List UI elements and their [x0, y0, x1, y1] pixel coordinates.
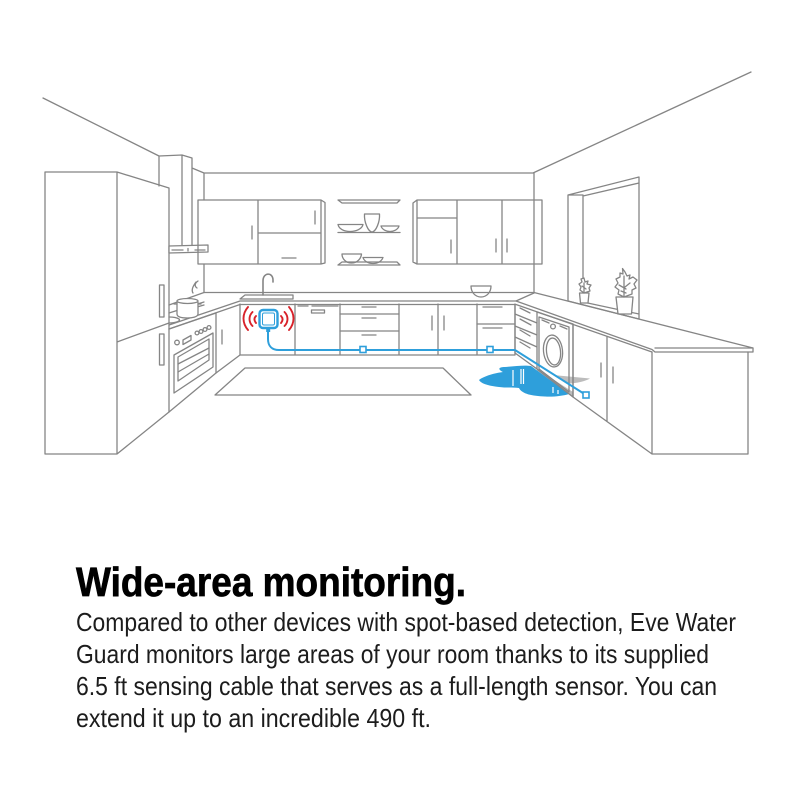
- body text: extend it up to an incredible 490 ft.: [76, 703, 431, 733]
- right base cabinets: [573, 324, 748, 454]
- potted plants: [579, 268, 637, 314]
- room walls and ceiling lines: [43, 72, 751, 293]
- sink and faucet: [240, 274, 293, 299]
- oven: [169, 313, 216, 412]
- window with sill: [568, 177, 639, 319]
- body text: [76, 607, 736, 733]
- water puddle: [479, 366, 590, 397]
- icon: red alarm waves: [244, 307, 294, 330]
- mixing bowl on counter: [471, 286, 491, 297]
- range hood: [169, 245, 208, 253]
- heading: Wide-area monitoring.: [76, 559, 466, 605]
- upper cabinets left: [198, 200, 325, 264]
- body text: 6.5 ft sensing cable that serves as a full-length sensor. You can: [76, 671, 717, 701]
- sensing cable: [268, 330, 589, 398]
- washing machine: [537, 312, 573, 397]
- cooktop with steaming pot: [169, 281, 204, 323]
- counter tops: [169, 292, 753, 352]
- kitchen illustration: [43, 72, 753, 454]
- side drawers: [515, 304, 537, 369]
- refrigerator: [45, 172, 169, 454]
- open shelves with bowls: [338, 200, 400, 265]
- icon: water guard device: [260, 310, 278, 332]
- upper cabinets right: [413, 200, 542, 264]
- body text: Guard monitors large areas of your room thanks to its supplied: [76, 639, 709, 669]
- corner base cabinet: [216, 304, 240, 373]
- floor rug: [215, 368, 471, 395]
- base cabinets back wall: [240, 304, 515, 355]
